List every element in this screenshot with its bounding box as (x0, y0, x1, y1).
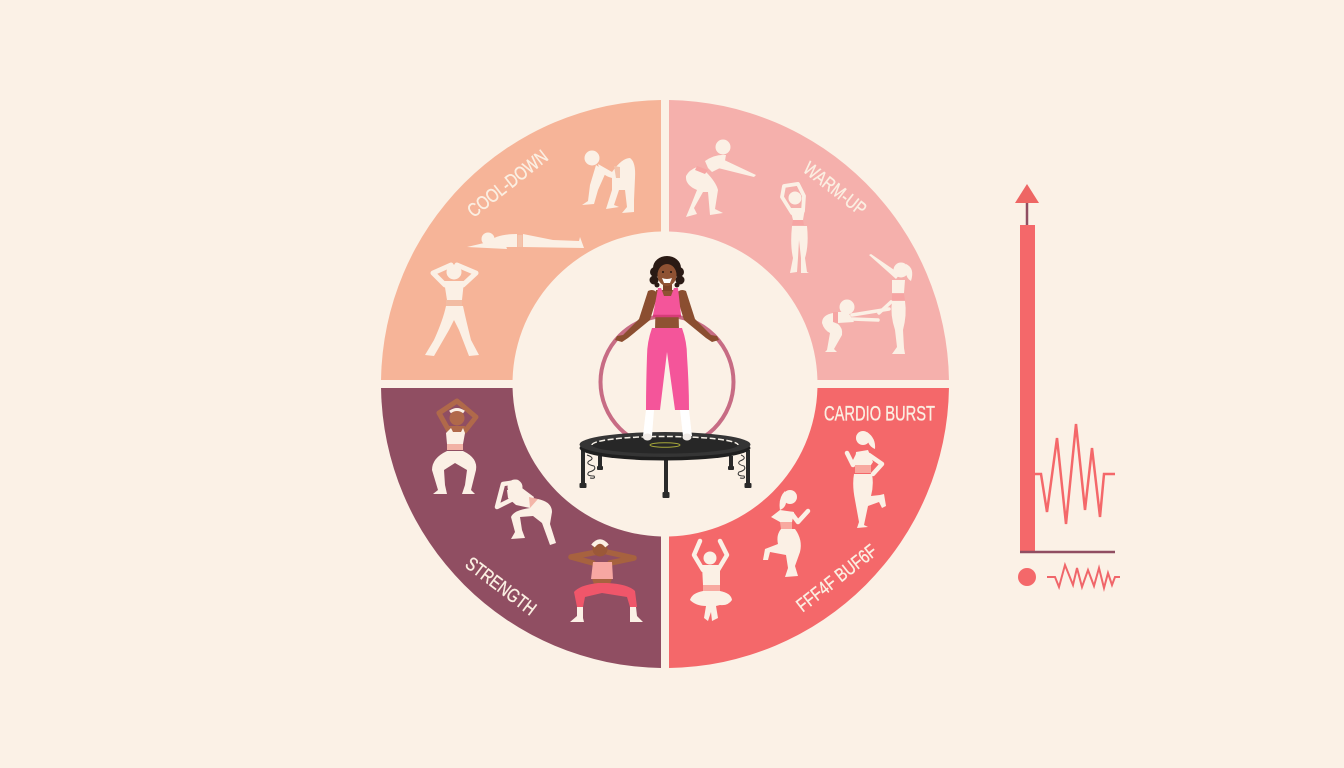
woman (615, 256, 719, 440)
figure: standing hands behind head (425, 264, 479, 356)
figure: squat arms overhead (432, 401, 476, 494)
figure: lying flat (467, 232, 584, 249)
pulse line (1035, 424, 1115, 524)
legend pulse (1047, 565, 1120, 588)
panel: strength quadrant (381, 388, 661, 668)
figure: wide squat in coral leggings (570, 542, 643, 622)
figure: squat jump arms up (690, 541, 732, 621)
central figure: woman on mini trampoline (580, 256, 752, 498)
panel: cardio burst quadrant (669, 388, 949, 668)
intensity bar (1020, 225, 1035, 553)
hoop (600, 316, 734, 448)
figure: partner standing (869, 254, 912, 354)
figure: runner top (847, 431, 886, 528)
panel: cool-down quadrant (381, 100, 661, 380)
figure: overhead stretch (782, 184, 809, 273)
figure: forward bend (582, 150, 635, 213)
label: fff4f buf6f: FFF4F BUF6F (793, 541, 881, 617)
label: warm-up: WARM-UP (799, 158, 870, 220)
label: cool-down: COOL-DOWN (464, 146, 552, 222)
figure: partner bending (822, 300, 889, 352)
figure: lunge reach (686, 140, 756, 217)
label: strength: STRENGTH (461, 553, 540, 620)
figure: side squat (497, 480, 556, 545)
figure: runner middle (763, 490, 808, 577)
arrow: upward (1015, 184, 1039, 226)
chart: intensity bar with pulse line (1015, 184, 1120, 588)
trampoline (580, 432, 752, 498)
label: cardio burst: CARDIO BURST (824, 402, 935, 426)
panel: warm-up quadrant (669, 100, 949, 380)
legend dot (1018, 568, 1036, 586)
